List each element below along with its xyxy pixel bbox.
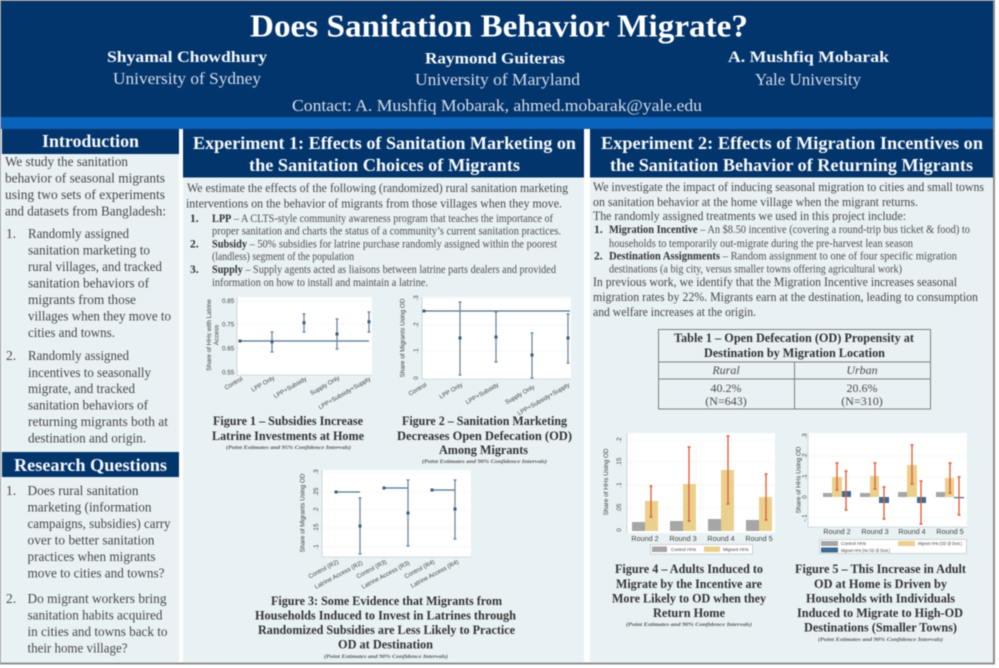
caption: figure 3: (Point Estimates and 90% Confidence Intervals)	[324, 653, 448, 660]
x axis labels: Latrine Access (R4)	[410, 559, 460, 590]
heading: Experiment 2	[590, 129, 993, 178]
introduction item 2: migrate, and tracked	[28, 381, 135, 396]
introduction item 1: sanitation behaviors of	[28, 276, 149, 290]
y axis labels: .3	[802, 433, 808, 439]
author: Shyamal Chowdhury: University of Sydney	[113, 69, 262, 88]
research question 1: campaigns, subsidies) carry	[28, 516, 171, 531]
legend: Control HHs	[841, 541, 867, 546]
y axis labels: 0	[802, 495, 808, 499]
previous work text	[593, 274, 978, 319]
x axis labels	[823, 527, 964, 536]
caption: figure 5: Induced to Migrate to High-OD	[797, 606, 963, 620]
introduction item 1: villages when they move to	[28, 308, 171, 324]
y axis labels: .15	[616, 457, 623, 466]
x axis labels: Control (R3)	[355, 559, 388, 580]
research question 2: 2.	[6, 591, 16, 606]
y axis labels: 0.85	[222, 298, 235, 305]
experiment 2 intro text: on sanitation behavior at the home village when the migrant returns.	[593, 194, 918, 209]
x axis labels	[631, 534, 773, 543]
x axis labels: Round 4	[898, 527, 926, 536]
y axis labels: .2	[802, 453, 808, 459]
y axis labels: Share of Migrants Using OD	[400, 298, 406, 377]
intervention list	[190, 213, 561, 289]
bars: control households	[632, 519, 759, 531]
research question 1: 1.	[6, 483, 16, 498]
y axis labels	[300, 469, 320, 552]
y axis labels: .25	[313, 487, 320, 496]
x axis labels: Control (R2)	[307, 559, 340, 580]
chart: figure 5	[796, 433, 967, 554]
introduction item 2: incentives to seasonally	[28, 365, 151, 380]
introduction paragraph	[5, 154, 166, 218]
y axis labels: Share of HHs Using OD	[796, 446, 802, 513]
table 1	[658, 330, 930, 409]
y axis labels: -.1	[802, 514, 808, 522]
introduction item 1: 1.	[6, 226, 16, 241]
treatment list: Destination Assignments – Random assignment to one of four specific migration	[609, 250, 957, 262]
legend	[820, 540, 966, 554]
research question 1: over to better sanitation	[28, 532, 155, 548]
caption: figure 4: (Point Estimates and 90% Confidence Intervals)	[626, 621, 752, 628]
panel: left column	[2, 129, 179, 662]
y axis labels: .3	[413, 295, 420, 301]
heading: Experiment 2: the Sanitation Behavior of Returning Migrants	[610, 155, 973, 175]
x axis labels: LPP Only	[438, 381, 465, 401]
caption: figure 2: Figure 2 – Sanitation Marketing	[402, 414, 568, 428]
caption: figure 4	[612, 562, 767, 628]
legend: Control HHs	[671, 547, 697, 552]
introduction item 2: destination and origin.	[28, 430, 146, 446]
confidence intervals	[836, 445, 960, 524]
rural column: (N=643)	[705, 394, 747, 408]
x axis labels: Round 2	[631, 534, 659, 543]
x axis labels: Round 3	[669, 534, 697, 543]
title: Does Sanitation Behavior Migrate?	[250, 8, 748, 44]
urban column: Urban	[846, 363, 878, 377]
table title: Destination by Migration Location	[704, 346, 885, 360]
x axis labels: Control	[407, 382, 428, 398]
research question 1: Does rural sanitation	[28, 483, 139, 498]
experiment 1 intro text: interventions on the behavior of migrants from those villages when they move.	[186, 196, 562, 210]
point estimates and confidence intervals	[334, 480, 456, 554]
introduction paragraph: behavior of seasonal migrants	[5, 170, 165, 186]
caption: figure 3: Households Induced to Invest in Latrines through	[255, 608, 516, 622]
caption: figure 1: (Point Estimates and 95% Confidence Intervals)	[226, 444, 351, 451]
y axis labels: .1	[313, 544, 320, 550]
intervention list: (landless) segment of the population	[212, 251, 354, 263]
x axis labels: Supply Only	[504, 383, 537, 406]
y axis labels: 0.65	[222, 346, 235, 352]
caption: figure 4: Migrate by the Incentive are	[616, 577, 763, 591]
author: Shyamal Chowdhury: Shyamal Chowdhury	[107, 49, 267, 66]
caption: figure 5: Destinations (Smaller Towns)	[804, 620, 957, 634]
heading: Research Questions: Research Questions	[14, 455, 167, 475]
y axis labels: .2	[313, 507, 320, 513]
heading: Introduction	[2, 129, 179, 154]
y axis labels: 0	[616, 528, 623, 532]
caption: figure 5: OD at Home is Driven by	[814, 577, 948, 591]
introduction item 1: cities and towns.	[28, 325, 115, 340]
author: Raymond Guiteras: Raymond Guiteras	[425, 50, 565, 68]
caption: figure 4: Figure 4 – Adults Induced to	[615, 562, 763, 576]
x axis labels: Round 2	[823, 527, 851, 536]
rural column	[705, 363, 747, 408]
research question 1	[6, 483, 171, 580]
y axis labels	[206, 298, 235, 376]
y axis labels	[603, 437, 623, 532]
table title: Table 1 – Open Defecation (OD) Propensity at	[674, 331, 915, 345]
x axis labels	[307, 559, 460, 591]
research question 2: Do migrant workers bring	[28, 591, 167, 606]
confidence intervals	[650, 436, 768, 521]
intervention list: 1.	[190, 213, 199, 225]
bars: migrant households	[645, 470, 772, 531]
y axis labels: .1	[413, 348, 420, 354]
caption: figure 5: Figure 5 – This Increase in Adult	[795, 562, 967, 576]
caption: figure 4: Return Home	[653, 606, 726, 620]
heading: Experiment 1: the Sanitation Choices of Migrants	[249, 155, 520, 175]
author: A. Mushfiq Mobarak: A. Mushfiq Mobarak	[728, 49, 889, 66]
panel: experiment 2	[590, 129, 993, 662]
author: Shyamal Chowdhury	[107, 49, 267, 88]
caption: figure 4: More Likely to OD when they	[612, 592, 767, 606]
treatment list: destinations (a big city, versus smaller towns offering agricultural work)	[609, 264, 902, 276]
treatment list: 2.	[594, 250, 603, 262]
introduction item 1: rural villages, and tracked	[28, 259, 162, 274]
caption: figure 5	[795, 562, 967, 643]
legend: Migrant HHs	[723, 547, 749, 552]
introduction item 1	[6, 226, 171, 340]
research question 2: in cities and towns back to	[28, 624, 168, 639]
caption: figure 3: Randomized Subsidies are Less Likely to Practice	[258, 623, 516, 637]
heading: Research Questions	[2, 452, 179, 477]
author: A. Mushfiq Mobarak	[728, 49, 889, 89]
bars: migrant households OD at destination	[832, 465, 954, 497]
y axis labels: 0	[413, 376, 420, 380]
urban column: 20.6%	[846, 381, 878, 395]
header banner	[1, 1, 993, 129]
introduction paragraph: and datasets from Bangladesh:	[5, 204, 166, 218]
caption: figure 3: Figure 3: Some Evidence that Migrants from	[271, 594, 503, 608]
intervention list: Subsidy – 50% subsidies for latrine purchase randomly assigned within the poorest	[212, 238, 558, 250]
point estimates and confidence intervals	[422, 302, 570, 378]
research question 2	[6, 591, 168, 656]
treatment list	[594, 223, 970, 276]
chart: figure 1	[206, 297, 373, 411]
caption: figure 5: Households with Individuals	[806, 592, 955, 606]
experiment 1 intro text: We estimate the effects of the following (randomized) rural sanitation marketing	[187, 180, 568, 195]
chart: figure 4	[603, 433, 775, 554]
x axis labels: Supply Only	[309, 374, 342, 397]
x axis labels: LPP Only	[250, 374, 277, 394]
caption: figure 1: Latrine Investments at Home	[212, 429, 365, 443]
introduction paragraph: using two sets of experiments	[5, 187, 165, 202]
intervention list: 2.	[190, 238, 199, 250]
x axis labels: Control (R4)	[403, 559, 436, 580]
introduction item 1: Randomly assigned	[28, 226, 129, 241]
x axis labels	[223, 374, 373, 411]
heading: Experiment 2: Experiment 2: Effects of Migration Incentives on	[601, 133, 983, 153]
author: Raymond Guiteras: University of Maryland	[415, 70, 581, 89]
x axis labels: Round 5	[936, 527, 964, 536]
introduction item 2: 2.	[6, 348, 16, 363]
x axis labels: LPP+Subsidy	[465, 381, 501, 406]
introduction item 2	[6, 348, 168, 446]
introduction paragraph: We study the sanitation	[5, 154, 128, 169]
caption: figure 1	[212, 414, 365, 451]
experiment 1 intro text	[186, 180, 568, 210]
research question 1: practices when migrants	[28, 549, 156, 564]
x axis labels: Latrine Access (R3)	[361, 560, 411, 591]
urban column: (N=310)	[841, 394, 883, 408]
caption: figure 2: Among Migrants	[439, 443, 528, 457]
y axis labels: .1	[616, 482, 623, 488]
research question 1: marketing (information	[28, 500, 152, 514]
point estimates and confidence intervals	[238, 312, 370, 352]
contact line: Contact: A. Mushfiq Mobarak, ahmed.mobarak@yale.edu	[292, 96, 703, 115]
chart: figure 2	[400, 295, 572, 417]
intervention list: proper sanitation and charts the status of a community’s current sanitation practices.	[212, 226, 561, 238]
y axis labels: .3	[313, 469, 320, 475]
x axis labels: Round 5	[745, 534, 773, 543]
introduction item 2: returning migrants both at	[28, 414, 168, 429]
caption: figure 2	[397, 414, 572, 465]
previous work text: and welfare increases at the origin.	[593, 304, 756, 319]
treatment list: 1.	[594, 224, 603, 236]
chart: figure 3	[300, 469, 471, 591]
caption: figure 2: (Point Estimates and 90% Confidence Intervals)	[422, 458, 547, 465]
x axis labels: LPP+Subsidy	[273, 375, 309, 400]
author: Raymond Guiteras	[415, 50, 581, 89]
author: A. Mushfiq Mobarak: Yale University	[755, 70, 861, 89]
caption: figure 5: (Point Estimates and 90% Confidence Intervals)	[818, 636, 943, 643]
legend: Migrant HHs (No OD @ Dest.)	[841, 548, 890, 553]
legend	[650, 544, 752, 554]
y axis labels: Share of Migrants Using OD	[300, 473, 306, 552]
rural column: Rural	[711, 363, 740, 377]
experiment 2 intro text	[593, 179, 984, 223]
intervention list: information on how to install and maintain a latrine.	[212, 277, 428, 289]
caption: figure 3: OD at Destination	[338, 638, 433, 652]
y axis labels: .15	[313, 523, 320, 532]
x axis labels: Round 3	[861, 527, 889, 536]
panel: experiment 1	[183, 129, 584, 662]
y axis labels: .1	[802, 474, 808, 480]
x axis labels: LPP+Subsidy+Supply	[516, 381, 572, 417]
heading: Experiment 1	[183, 129, 584, 178]
treatment list: households to temporarily out-migrate during the pre-harvest lean season	[609, 238, 913, 250]
heading: Introduction: Introduction	[42, 131, 139, 151]
experiment 2 intro text: The randomly assigned treatments we used in this project include:	[593, 208, 906, 223]
caption: figure 1: Figure 1 – Subsidies Increase	[213, 414, 364, 428]
y axis labels	[400, 295, 420, 380]
caption: figure 2: Decreases Open Defecation (OD)	[397, 429, 572, 443]
y axis labels: .05	[616, 503, 623, 512]
bars: migrant households no OD at destination	[842, 491, 964, 503]
bars: control households	[823, 492, 945, 497]
x axis labels: LPP+Subsidy+Supply	[317, 375, 373, 411]
legend: Migrant HHs (OD @ Dest.)	[918, 541, 962, 546]
introduction item 1: sanitation marketing to	[28, 242, 150, 258]
y axis labels: .2	[413, 322, 420, 328]
y axis labels	[796, 433, 808, 522]
research question 1: move to cities and towns?	[28, 566, 164, 580]
y axis labels: Share of HHs Using OD	[603, 448, 610, 515]
research question 2: sanitation habits acquired	[28, 608, 163, 622]
intervention list: LPP – A CLTS-style community awareness program that teaches the importance of	[212, 213, 553, 225]
table title	[674, 331, 915, 360]
previous work text: In previous work, we identify that the Migration Incentive increases seasonal	[593, 274, 957, 289]
research question 2: their home village?	[28, 640, 128, 656]
intervention list: 3.	[190, 264, 199, 276]
introduction item 2: Randomly assigned	[28, 348, 129, 363]
y axis labels: 0.55	[222, 370, 235, 376]
introduction item 1: migrants from those	[28, 292, 136, 307]
introduction item 2: sanitation behaviors of	[28, 398, 148, 412]
x axis labels: Latrine Access (R2)	[314, 560, 364, 591]
intervention list: Supply – Supply agents acted as liaisons between latrine parts dealers and provided	[212, 264, 556, 276]
caption: figure 3	[255, 594, 516, 660]
y axis labels: .2	[616, 437, 623, 443]
heading: Experiment 1: Experiment 1: Effects of Sanitation Marketing on	[193, 133, 576, 153]
urban column	[841, 363, 883, 408]
y axis labels: Share of HHs with Latrine	[206, 299, 213, 371]
y axis labels: Access	[214, 325, 220, 345]
x axis labels: Round 4	[707, 534, 735, 543]
x axis labels: Control	[223, 376, 244, 392]
x axis labels	[407, 381, 572, 417]
treatment list: Migration Incentive – An $8.50 incentive (covering a round-trip bus ticket & food) to	[609, 223, 970, 236]
rural column: 40.2%	[710, 381, 742, 395]
y axis labels: 0.75	[222, 322, 235, 328]
